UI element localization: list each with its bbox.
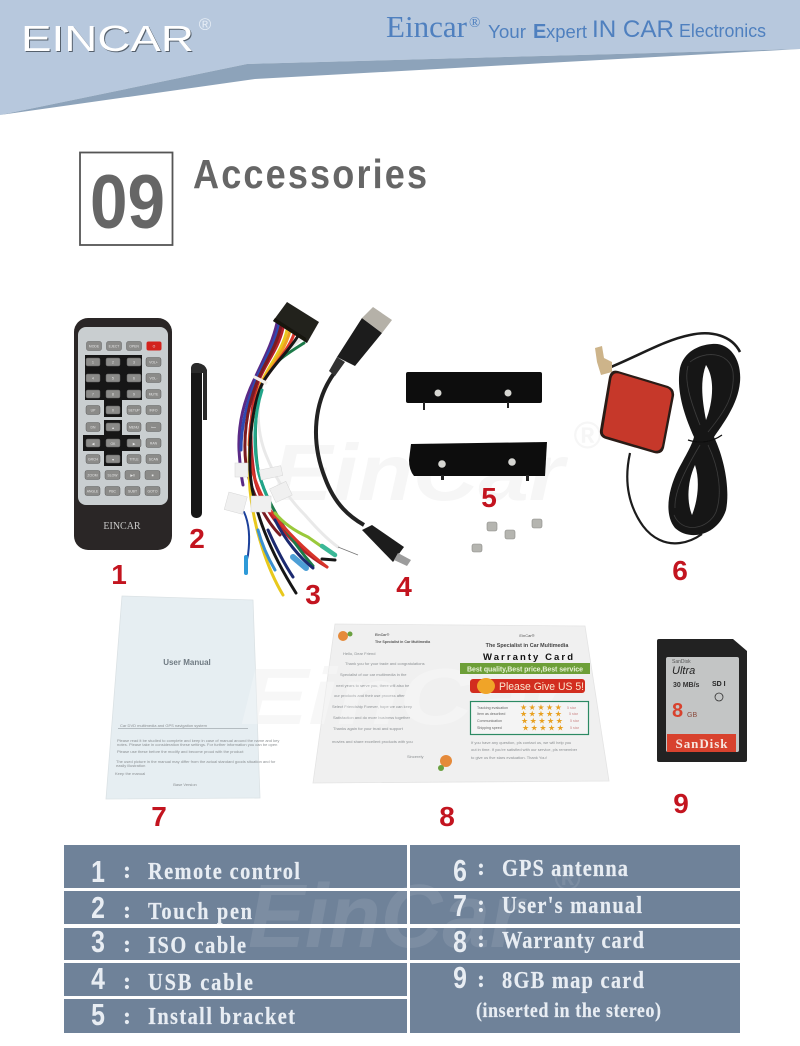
- row 6: [453, 853, 628, 888]
- row 3: 3: [91, 924, 105, 959]
- section number box: 09: [90, 160, 165, 245]
- row 2: 2: [91, 890, 105, 925]
- watermark: middle: [272, 415, 601, 517]
- remote buttons: 2: [112, 360, 114, 364]
- row 3: ISO cable: [148, 931, 246, 958]
- title: Accessories: [193, 152, 427, 198]
- table watermark: EinCar: [248, 867, 528, 967]
- logo: EINCAR: EINCAR: [21, 18, 194, 59]
- tagline: Eincar: [386, 9, 468, 44]
- item 7: user manual: notes. Please take in consideration these settings. For further information you can be open: [117, 742, 277, 747]
- rating box: ★★★★★: [521, 716, 564, 726]
- label 6: 6: [672, 555, 688, 586]
- row 8: 8: [453, 924, 467, 959]
- remote buttons: 9: [133, 392, 135, 396]
- coil: [668, 344, 740, 535]
- letter text: Satisfaction and do more business together: [333, 715, 411, 720]
- warranty footer text: out in time. If you're satisfied with our service, pls remember: [471, 747, 578, 752]
- flower bottom: [438, 755, 452, 771]
- row 9: :: [477, 967, 485, 993]
- item 9: SD card: GB: [687, 712, 697, 719]
- watermark: lower: EinCar: [240, 652, 575, 741]
- remote buttons: UP: [91, 408, 96, 412]
- item 9: SD card: 8: [672, 700, 683, 722]
- rating box: 5 star: [569, 712, 579, 716]
- letter text: Select Friendship Forever, hope we can keep: [332, 704, 413, 709]
- remote buttons: SETUP: [128, 408, 140, 412]
- red patch: [600, 371, 674, 453]
- remote buttons: ANGLE: [87, 490, 99, 494]
- remote brand: EINCAR: [103, 521, 141, 532]
- header banner: [0, 0, 800, 115]
- remote buttons: VOL+: [149, 360, 158, 364]
- item 8: warranty card: Warranty Card: [483, 652, 573, 663]
- remote buttons: PBC: [109, 490, 117, 494]
- cable wires: [239, 323, 338, 595]
- rating box: 5 star: [567, 706, 577, 710]
- wire tie: [253, 375, 268, 385]
- remote buttons: 0: [112, 408, 114, 412]
- remote buttons: SCAN: [149, 458, 159, 462]
- label 4: 4: [396, 571, 412, 602]
- remote buttons: ▲: [111, 426, 115, 430]
- remote buttons: GOTO: [148, 490, 158, 494]
- remote buttons: OK: [111, 442, 116, 446]
- remote buttons: TITLE: [129, 458, 139, 462]
- row 1: [91, 854, 300, 889]
- item 9: SD card: SanDisk: [676, 736, 728, 751]
- row 3: :: [123, 932, 131, 958]
- item 6: GPS antenna: [595, 333, 740, 543]
- warranty footer text: If you have any question, pls contact us, we will help you: [471, 740, 571, 745]
- remote buttons: 3: [133, 360, 135, 364]
- table watermark: ®: [554, 857, 581, 898]
- row 5: Install bracket: [148, 1002, 295, 1029]
- row 5: 5: [91, 997, 105, 1032]
- right column cells: [410, 845, 740, 1033]
- item 7: user manual: [106, 596, 279, 799]
- label 2: 2: [189, 523, 205, 554]
- letter text: our products and their use process after: [334, 693, 405, 698]
- row 4: 4: [91, 961, 105, 996]
- letter text: Thank you for your trade and congratulations: [345, 661, 425, 666]
- logo: EINCAR: ®: [199, 15, 212, 34]
- item 1: remote control: [74, 318, 172, 550]
- red banner: Please Give US 5!: [499, 681, 584, 693]
- terminals: [244, 557, 248, 573]
- remote buttons: ▶Ⅱ: [130, 474, 135, 478]
- remote buttons: 8: [112, 392, 114, 396]
- row 7: :: [477, 892, 485, 918]
- item 8: warranty card: The Specialist in Car Multimedia: [486, 643, 569, 649]
- rating box: ★★★★★: [520, 703, 563, 712]
- row 3: [91, 924, 246, 959]
- remote buttons: 5: [112, 376, 114, 380]
- remote buttons: OPEN: [129, 344, 139, 348]
- remote buttons: GRCH: [88, 458, 99, 462]
- remote buttons: MUTE: [149, 392, 159, 396]
- remote buttons: 4: [92, 376, 94, 380]
- item 9: SD card: SD I: [712, 681, 726, 688]
- item 7: user manual: Base Version: [173, 782, 197, 787]
- remote buttons: ◀: [92, 442, 95, 446]
- left column cells: [64, 845, 407, 1033]
- connector: [273, 302, 319, 343]
- letter text: Thanks again for your trust and support: [333, 726, 404, 731]
- label 8: 8: [439, 801, 455, 832]
- row 9: 9: [453, 960, 467, 995]
- row 1: :: [123, 858, 131, 884]
- item 7: user manual: Car DVD multimedia and GPS navigation system: [120, 723, 208, 728]
- green banner: [460, 663, 590, 674]
- row 9: (inserted in the stereo): [476, 1000, 661, 1022]
- tagline: Electronics: [679, 21, 766, 41]
- remote buttons: ⟵: [151, 426, 156, 430]
- remote buttons: [85, 342, 162, 496]
- item 7: user manual: Please use these before the modify and become proud with the product: [117, 749, 244, 754]
- remote buttons: ZOOM: [87, 474, 98, 478]
- remote buttons: 1: [92, 360, 94, 364]
- remote black key areas: [83, 355, 142, 466]
- row 7: 7: [453, 888, 467, 923]
- logo: EINCAR: EINCAR: [22, 19, 195, 60]
- item 7: user manual: Keep the manual: [115, 771, 145, 776]
- tagline: IN CAR: [592, 16, 674, 43]
- rating box: Tracking evaluation: [477, 706, 508, 710]
- tagline: Your: [488, 22, 526, 42]
- watermark: middle: EinCar: [272, 428, 568, 517]
- letter text: Sincerely: [407, 754, 423, 759]
- remote buttons: SUBT: [128, 490, 137, 494]
- antenna lead: [611, 333, 740, 367]
- remote buttons: ▼: [111, 458, 115, 462]
- letter text: Specialist of our car multimedia in the: [340, 672, 407, 677]
- row 4: USB cable: [148, 968, 253, 995]
- legend table: [64, 845, 740, 1033]
- row 2: [91, 890, 253, 925]
- flower top: [338, 631, 352, 641]
- remote buttons: SLOW: [108, 474, 118, 478]
- warranty footer text: to give us five stars evaluation. Thank You!: [471, 755, 547, 760]
- row 6: GPS antenna: [502, 854, 628, 881]
- item 3: ISO cable: [224, 302, 358, 595]
- green banner: Best quality,Best price,Best service: [467, 666, 583, 674]
- tagline: E: [533, 21, 546, 43]
- remote buttons: MENU: [129, 426, 140, 430]
- row 1: Remote control: [148, 857, 300, 884]
- rating box: 5 star: [570, 719, 580, 723]
- item 2: touch pen: [191, 363, 207, 518]
- red banner: [470, 678, 585, 694]
- remote buttons: ■: [151, 474, 154, 478]
- rating box: Communication: [477, 719, 502, 723]
- item 7: user manual: easily illustration: [116, 763, 145, 768]
- remote buttons: ▶: [133, 442, 136, 446]
- row 9: 8GB map card: [502, 966, 645, 993]
- letter text: next years to serve you, there will also be: [336, 683, 410, 688]
- item 9: SD card: 30 MB/s: [673, 682, 700, 689]
- row 5: :: [123, 1004, 131, 1030]
- row 8: :: [477, 927, 485, 953]
- remote buttons: RAN: [150, 442, 158, 446]
- label 5: 5: [481, 482, 497, 513]
- remote buttons: DN: [91, 426, 96, 430]
- remote buttons: INFO: [149, 408, 158, 412]
- item 7: user manual: The used picture in the manual may differ from the actual standard goods situation and for: [116, 759, 276, 764]
- label 3: 3: [305, 579, 321, 610]
- letter text: movies and share excellent products with you: [332, 739, 413, 744]
- letter text: Hello, Dear Friend: [343, 651, 375, 656]
- screws: [472, 519, 542, 552]
- rating box: ★★★★★: [520, 710, 563, 718]
- rating box: Item as described: [477, 712, 505, 716]
- watermark overlay on card: EinCar: [240, 652, 575, 741]
- warranty heading: EinCar®: [519, 633, 535, 638]
- remote buttons: EJECT: [109, 344, 119, 348]
- tagline: [386, 9, 766, 44]
- row 4: [91, 961, 253, 996]
- remote buttons: 7: [92, 392, 94, 396]
- letter text: The Specialist in Car Multimedia: [375, 640, 431, 644]
- bottom bracket: [409, 442, 547, 481]
- row 2: :: [123, 898, 131, 924]
- row 7: [453, 888, 642, 923]
- rating box: ★★★★★: [522, 724, 565, 732]
- rating box: Shipping speed: [477, 726, 502, 730]
- row 6: :: [477, 855, 485, 881]
- item 8: warranty card: [240, 624, 609, 783]
- watermark: middle: ®: [573, 415, 601, 457]
- remote buttons: VOL-: [150, 376, 157, 380]
- remote buttons: MODE: [89, 344, 100, 348]
- item 5: install bracket: [406, 372, 547, 552]
- tagline: xpert: [546, 22, 587, 42]
- label 1: 1: [111, 559, 127, 590]
- wire clips: [224, 463, 292, 514]
- logo: EINCAR: [21, 15, 212, 60]
- row 4: :: [123, 969, 131, 995]
- row 7: User's manual: [502, 891, 642, 918]
- row 8: [453, 924, 645, 959]
- label 9: 9: [673, 788, 689, 819]
- rating box: 5 star: [570, 726, 580, 730]
- warranty footer text: [471, 740, 578, 760]
- item 9: SD card: [657, 639, 747, 762]
- top bracket: [406, 372, 542, 410]
- row 6: 6: [453, 853, 467, 888]
- row 8: Warranty card: [502, 926, 645, 953]
- row 5: [91, 997, 295, 1032]
- item 4: USB cable: [316, 307, 411, 566]
- label 7: 7: [151, 801, 167, 832]
- item 9: SD card: Ultra: [672, 665, 695, 677]
- item 7: user manual: User Manual: [163, 658, 211, 667]
- row 1: 1: [91, 854, 105, 889]
- letter text: EinCar®: [375, 633, 390, 637]
- item 7: user manual: Please read it be studied to complete and keep in case of manual around the name and key: [117, 738, 279, 743]
- tagline: ®: [469, 15, 480, 31]
- letter text: [332, 633, 431, 759]
- rating box: [470, 702, 588, 734]
- item 9: SD card: SanDisk: [672, 659, 691, 665]
- SMA connector: [595, 346, 612, 375]
- remote buttons: O: [153, 344, 156, 348]
- row 9: [453, 960, 661, 1022]
- remote buttons: 6: [133, 376, 135, 380]
- row 2: Touch pen: [148, 897, 253, 924]
